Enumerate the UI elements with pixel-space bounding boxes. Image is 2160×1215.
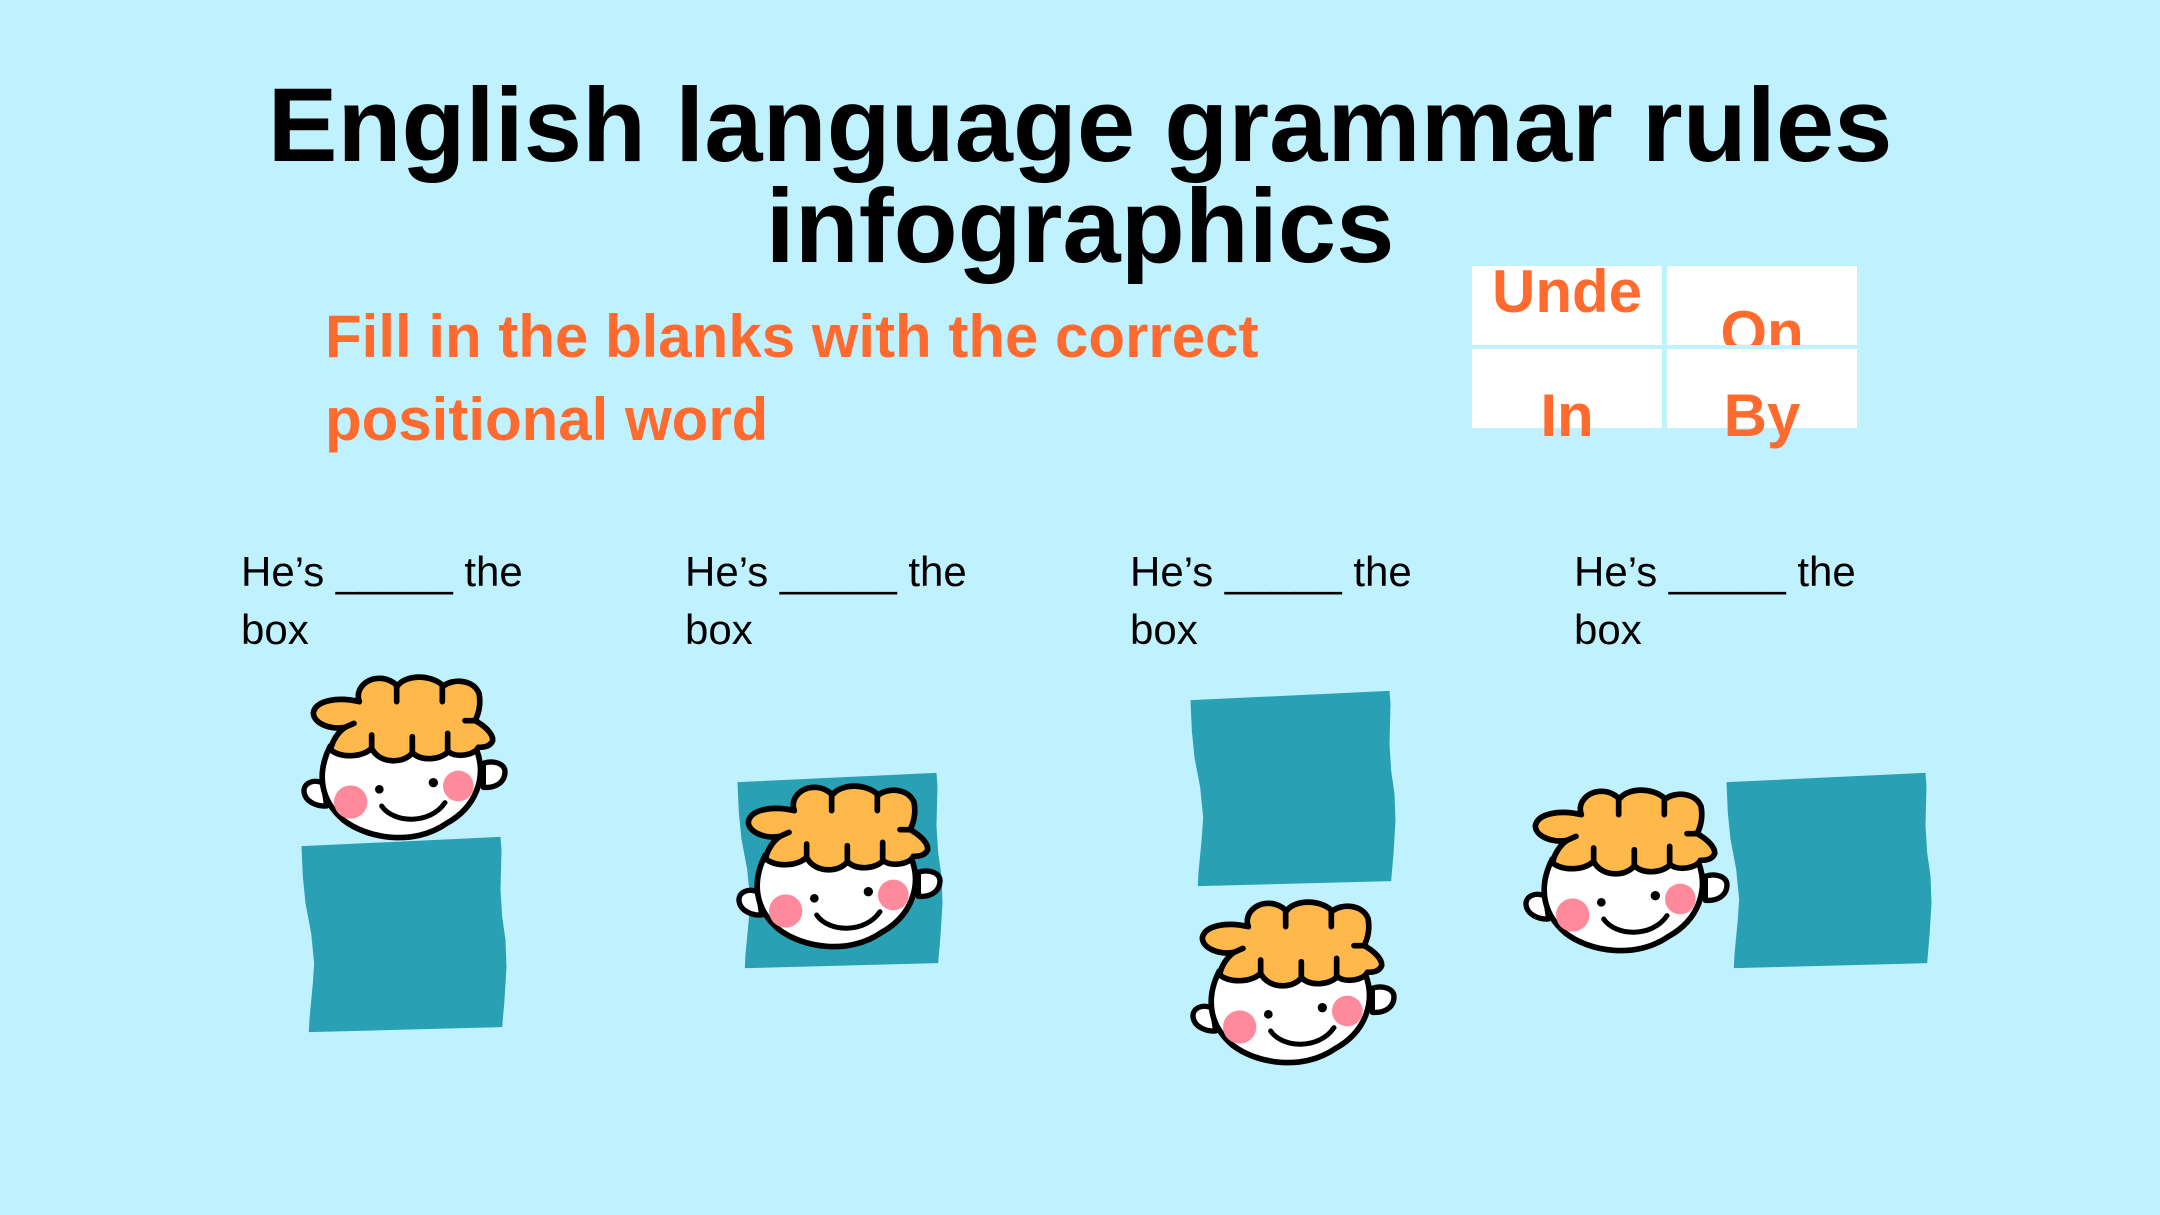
instruction text: positional word [325,386,768,453]
instruction text: Fill in the blanks with the correct [325,303,1258,370]
cell: On [1667,266,1857,345]
illustration: boy under box [1190,690,1397,1066]
title: English language grammar rules [268,67,1892,184]
illustration: boy in box [736,772,943,968]
panel: exercise 4, by the box [1523,548,1932,968]
sentence 3: box [1130,606,1198,653]
sentence 1: He’s _____ the [241,548,523,595]
title: infographics [766,168,1394,285]
sentence 4: He’s _____ the [1574,548,1856,595]
sentence 3: He’s _____ the [1130,548,1412,595]
cell: By [1667,349,1857,428]
instruction text [325,303,1258,453]
illustration: boy on box [301,674,508,1032]
sentence 2: He’s _____ the [685,548,967,595]
panel: exercise 1, on the box [241,548,523,1032]
sentence 4 [1574,548,1856,653]
cell: In [1472,349,1662,428]
word bank table [1472,266,1857,449]
sentence 1 [241,548,523,653]
cell: In: In [1540,382,1594,449]
sentence 1: box [241,606,309,653]
illustration: boy by box [1523,772,1932,968]
sentence 4: box [1574,606,1642,653]
panel: exercise 3, under the box [1130,548,1412,1066]
sentence 2: box [685,606,753,653]
title [268,67,1892,285]
panel: exercise 2, in the box [685,548,967,968]
cell: By: By [1724,382,1800,449]
cell: Under [1472,266,1662,345]
sentence 3 [1130,548,1412,653]
sentence 2 [685,548,967,653]
